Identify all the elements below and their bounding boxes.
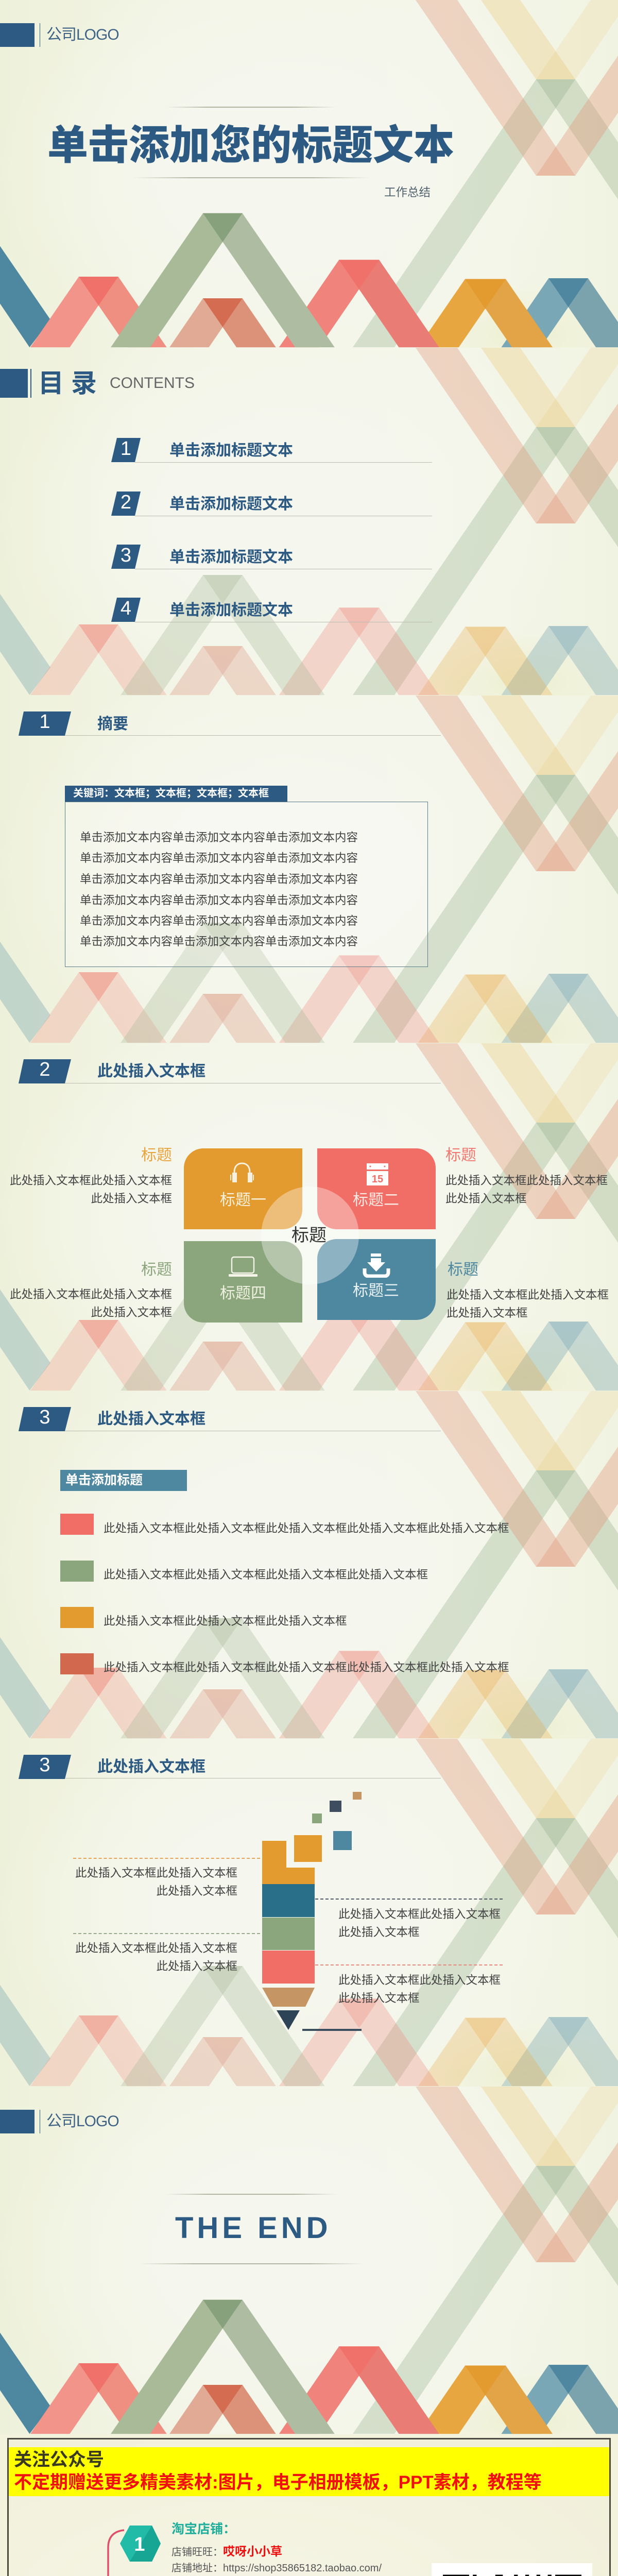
panel: slide 1 cover [0, 0, 618, 348]
note: upper left [75, 1863, 237, 1902]
side note: top right: 此处插入文本框 [445, 1192, 527, 1205]
list row 2 [60, 1561, 511, 1582]
contents item 3: 单击添加标题文本 [169, 549, 293, 566]
side note: bottom left [9, 1260, 172, 1324]
promo frame [7, 2438, 611, 2576]
section header: 此处插入文本框 [97, 1411, 205, 1428]
note: upper right: 此处插入文本框此处插入文本框 [338, 1908, 501, 1921]
list heading bar [60, 1470, 187, 1491]
abstract text box: 单击添加文本内容单击添加文本内容单击添加文本内容 [80, 894, 358, 907]
quadrant: red [317, 1148, 436, 1229]
side note: bottom left: 此处插入文本框 [91, 1306, 172, 1319]
section header: 此处插入文本框 [97, 1063, 205, 1080]
section header [19, 1406, 441, 1431]
yellow banner: 关注公众号 [14, 2450, 104, 2470]
contents item 1 [111, 438, 432, 463]
pencil graphic [0, 1739, 618, 2087]
note: upper left: 此处插入文本框此处插入文本框 [75, 1867, 237, 1879]
note: upper left: 此处插入文本框 [156, 1885, 237, 1897]
icon: headphones [230, 1162, 254, 1182]
quadrant titles: 标题一 [220, 1192, 266, 1209]
note: lower left: 此处插入文本框此处插入文本框 [75, 1942, 237, 1955]
contents item 3 [111, 545, 432, 569]
abstract text box: 单击添加文本内容单击添加文本内容单击添加文本内容 [80, 852, 358, 865]
contents item 4: 4 [121, 598, 131, 619]
side note: top right [445, 1145, 610, 1210]
subtitle: 工作总结 [384, 186, 431, 199]
side note: bottom right: 此处插入文本框此处插入文本框 [447, 1289, 609, 1301]
list row 1 [60, 1514, 511, 1535]
centre circle [261, 1187, 359, 1284]
contents item 2 [111, 492, 432, 516]
logo block: 公司LOGO [46, 26, 119, 43]
contents item 2: 2 [121, 492, 131, 513]
panel: slide 4 four quadrants [0, 1043, 618, 1391]
abstract text box: 单击添加文本内容单击添加文本内容单击添加文本内容 [80, 914, 358, 927]
taobao details [171, 2519, 377, 2576]
note: upper right: 此处插入文本框 [338, 1926, 420, 1939]
section header: 摘要 [97, 716, 128, 733]
contents item 4: 单击添加标题文本 [169, 602, 293, 619]
quadrant titles: 标题四 [220, 1285, 266, 1302]
quadrant titles [220, 1190, 400, 1306]
background ribbons and mountains [0, 2087, 618, 2434]
panel: slide 2 contents [0, 348, 618, 696]
section header [19, 1754, 441, 1779]
panel: slide 6 pencil diagram [0, 1739, 618, 2087]
quadrant: blue [317, 1239, 436, 1320]
taobao details: 淘宝店铺： [171, 2522, 236, 2536]
contents heading [0, 369, 195, 398]
keyword bar: 关键词：文本框；文本框；文本框；文本框 [73, 788, 269, 799]
main title: 单击添加您的标题文本 [47, 122, 454, 168]
side note: top right: 此处插入文本框此处插入文本框 [445, 1174, 608, 1187]
list row 1: 此处插入文本框此处插入文本框此处插入文本框此处插入文本框此处插入文本框 [104, 1522, 509, 1535]
contents item 4 [111, 598, 432, 622]
note: upper right [338, 1904, 501, 1943]
mind-map bracket and hexagons [0, 2434, 618, 2576]
background ribbons and mountains [0, 696, 618, 1043]
list row 4: 此处插入文本框此处插入文本框此处插入文本框此处插入文本框此处插入文本框 [104, 1661, 509, 1674]
note: lower right: 此处插入文本框 [338, 1992, 420, 2005]
icon: download tray [363, 1253, 390, 1278]
section header: 此处插入文本框 [97, 1758, 205, 1775]
QR code [432, 2563, 592, 2576]
panel: slide 7 the end [0, 2087, 618, 2434]
note: lower left [75, 1938, 237, 1977]
list heading bar: 单击添加标题 [65, 1473, 143, 1487]
logo block [0, 23, 119, 47]
quadrant titles: 标题三 [353, 1282, 399, 1299]
background ribbons and mountains [0, 0, 618, 347]
list row 3 [60, 1607, 511, 1629]
list row 2: 此处插入文本框此处插入文本框此处插入文本框此处插入文本框 [104, 1568, 428, 1581]
side note: bottom right: 此处插入文本框 [447, 1307, 528, 1319]
icon: calendar: 15 [372, 1174, 383, 1185]
closing title: THE END [175, 2211, 332, 2245]
contents item 2: 单击添加标题文本 [169, 496, 293, 513]
side note: bottom right: 标题 [448, 1261, 478, 1278]
background ribbons and mountains [0, 1043, 618, 1391]
quadrant titles: 标题二 [353, 1192, 399, 1209]
abstract text box [65, 802, 428, 967]
abstract text box: 单击添加文本内容单击添加文本内容单击添加文本内容 [80, 831, 358, 844]
side note: top left: 此处插入文本框此处插入文本框 [10, 1174, 172, 1187]
panel: slide 3 abstract [0, 696, 618, 1043]
section header: 3 [39, 1406, 50, 1428]
quadrant: green [184, 1241, 302, 1323]
section header: 1 [39, 711, 50, 733]
logo block [0, 2110, 124, 2133]
abstract text box: 单击添加文本内容单击添加文本内容单击添加文本内容 [80, 873, 358, 886]
logo block: 公司LOGO [46, 2113, 119, 2130]
background ribbons and mountains [0, 1391, 618, 1739]
side note: top left: 标题 [141, 1147, 172, 1164]
icon: laptop [229, 1256, 258, 1277]
section header [19, 711, 441, 736]
side note: bottom left: 此处插入文本框此处插入文本框 [10, 1288, 172, 1301]
panel: slide 8 promotion [0, 2434, 618, 2576]
quadrant: orange [184, 1148, 302, 1229]
keyword bar [65, 786, 287, 802]
side note: top left [9, 1145, 172, 1210]
contents heading: CONTENTS [110, 375, 195, 392]
icon: calendar [367, 1163, 388, 1185]
side note: bottom right [447, 1260, 611, 1324]
section header: 3 [39, 1754, 50, 1776]
contents heading: 目录 [38, 369, 104, 398]
background ribbons and mountains [0, 348, 618, 696]
mind-map bracket and hexagons: 1 [134, 2534, 145, 2555]
background ribbons and mountains [0, 1739, 618, 2087]
panel: slide 5 list [0, 1391, 618, 1739]
contents item 1: 1 [121, 438, 131, 460]
note: lower right [338, 1970, 501, 2009]
contents item 1: 单击添加标题文本 [169, 442, 293, 459]
list row 3: 此处插入文本框此处插入文本框此处插入文本框 [104, 1615, 347, 1628]
section header: 2 [39, 1059, 50, 1080]
abstract text box: 单击添加文本内容单击添加文本内容单击添加文本内容 [80, 935, 358, 948]
centre label: 标题 [291, 1226, 327, 1245]
note: lower right: 此处插入文本框此处插入文本框 [338, 1974, 501, 1987]
list row 4 [60, 1653, 511, 1675]
yellow banner [9, 2447, 609, 2496]
side note: top left: 此处插入文本框 [91, 1192, 172, 1205]
side note: bottom left: 标题 [141, 1261, 172, 1278]
note: lower left: 此处插入文本框 [156, 1960, 237, 1973]
yellow banner: 不定期赠送更多精美素材:图片，电子相册模板，PPT素材，教程等 [14, 2472, 542, 2493]
section header [19, 1059, 441, 1083]
side note: top right: 标题 [445, 1147, 476, 1164]
contents item 3: 3 [121, 545, 131, 566]
taobao details: 店铺旺旺：哎呀小小草 [171, 2545, 282, 2558]
taobao details: 店铺地址：https://shop35865182.taobao.com/ [171, 2563, 382, 2574]
